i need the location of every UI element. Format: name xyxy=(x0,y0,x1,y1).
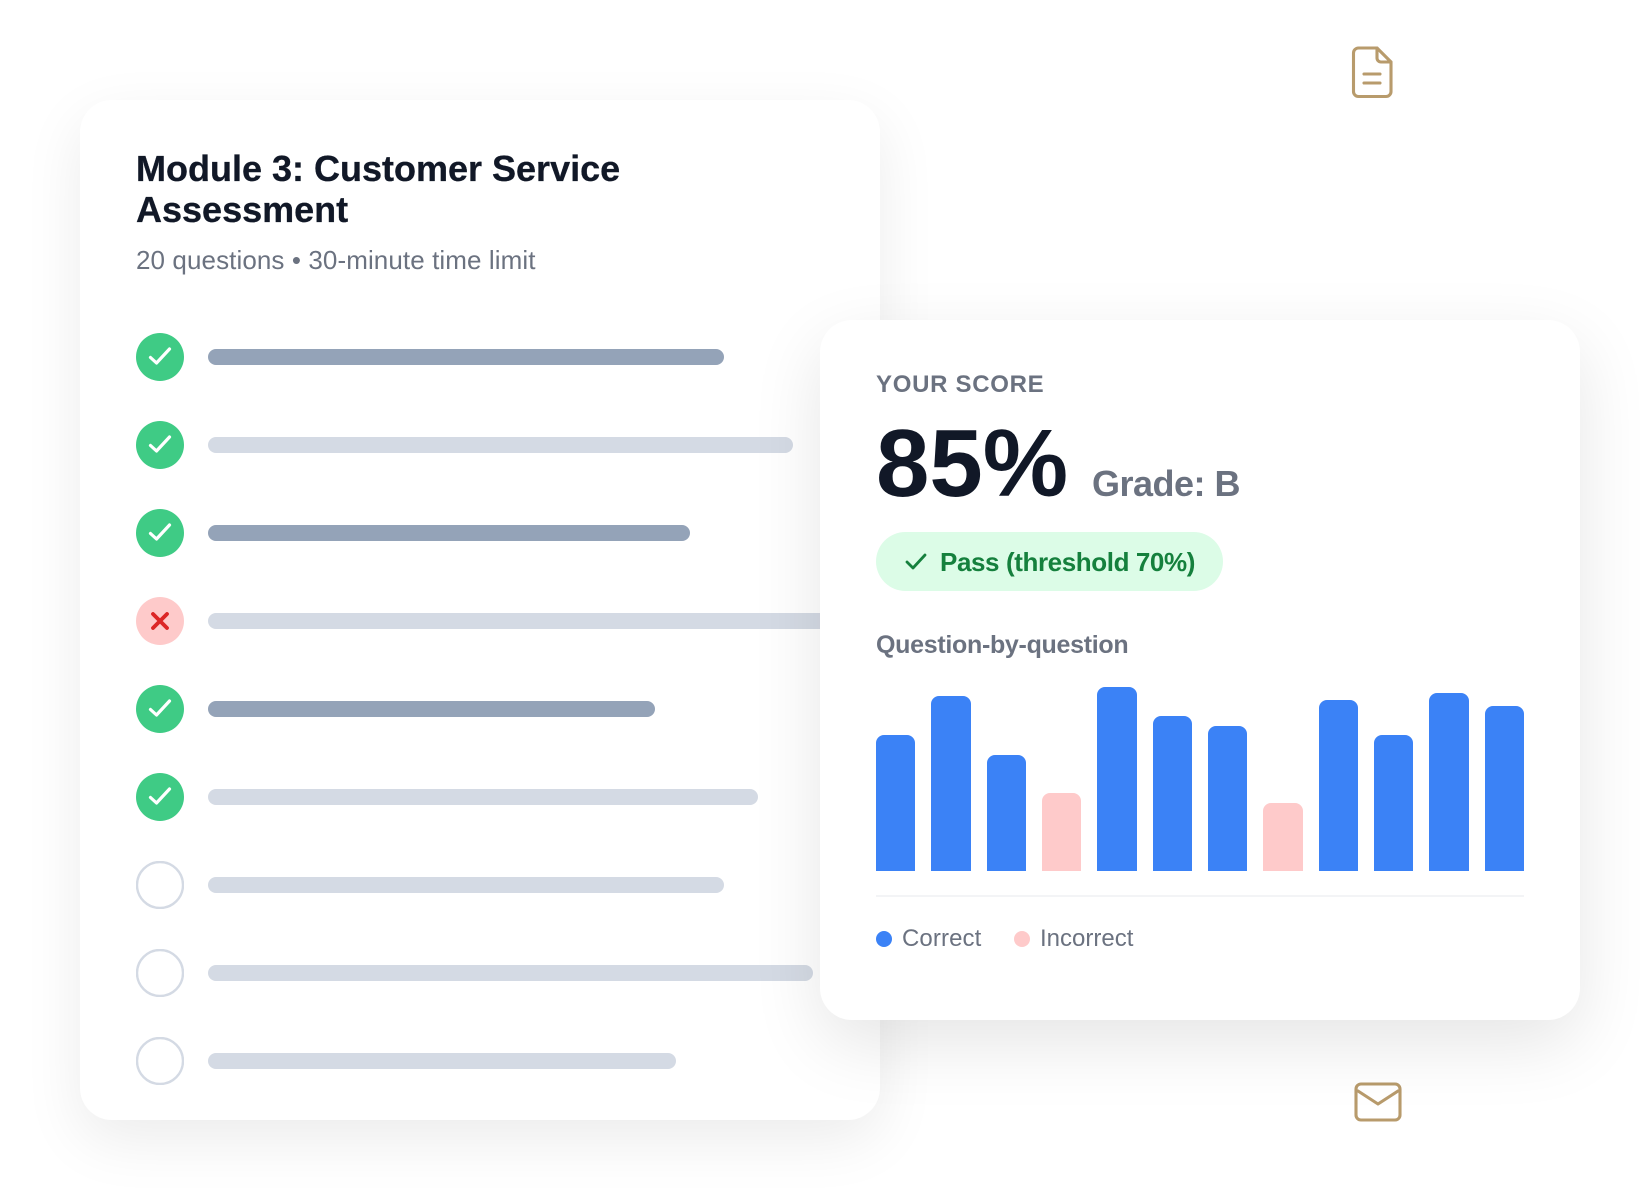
question 2 status: correct xyxy=(136,421,184,469)
icon: envelope xyxy=(1354,1082,1402,1122)
bar q5 correct xyxy=(1097,687,1137,871)
stat: grade: Grade: B xyxy=(1092,463,1240,504)
heading: question by question: Question-by-question xyxy=(876,631,1128,659)
panel: module assessment xyxy=(80,100,880,1120)
question 5 status: correct xyxy=(136,685,184,733)
bar q4 incorrect xyxy=(1042,793,1081,871)
bar q6 correct xyxy=(1153,716,1192,871)
icon: document xyxy=(1352,46,1393,98)
bar q2 correct xyxy=(931,696,971,871)
question 9 status: unanswered xyxy=(136,1037,184,1085)
bar q10 correct xyxy=(1374,735,1413,871)
panel: score xyxy=(820,320,1580,1020)
bar q11 correct xyxy=(1429,693,1469,871)
question 3 status: correct xyxy=(136,509,184,557)
question 4 bar xyxy=(208,613,848,629)
legend dot: incorrect xyxy=(1014,931,1030,947)
question 4 status: incorrect xyxy=(136,597,184,645)
question 7 status: unanswered xyxy=(136,861,184,909)
text: module details: 20 questions • 30-minute time limit xyxy=(136,245,536,275)
question 8 status: unanswered xyxy=(136,949,184,997)
bar q1 correct xyxy=(876,735,915,871)
question 9 bar xyxy=(208,1053,676,1069)
bar q9 correct xyxy=(1319,700,1358,871)
label: your score: YOUR SCORE xyxy=(876,371,1044,398)
question 8 bar xyxy=(208,965,813,981)
bar q8 incorrect xyxy=(1263,803,1303,871)
stat: score percent: 85% xyxy=(876,410,1068,517)
question 1 bar xyxy=(208,349,724,365)
question 6 status: correct xyxy=(136,773,184,821)
bar q12 correct xyxy=(1485,706,1524,871)
heading: module title: Module 3: Customer Service xyxy=(136,148,620,189)
legend xyxy=(876,925,1134,952)
question 1 status: correct xyxy=(136,333,184,381)
question 7 bar xyxy=(208,877,724,893)
badge: pass xyxy=(876,532,1223,591)
legend label: correct: Correct xyxy=(902,925,981,952)
bar q7 correct xyxy=(1208,726,1247,871)
question 2 bar xyxy=(208,437,793,453)
heading: module title xyxy=(136,148,620,230)
bar q3 correct xyxy=(987,755,1026,871)
heading: module title: Assessment xyxy=(136,189,348,230)
question list xyxy=(136,333,820,1085)
legend label: incorrect: Incorrect xyxy=(1040,925,1133,952)
legend dot: correct xyxy=(876,931,892,947)
question 3 bar xyxy=(208,525,690,541)
bar chart xyxy=(876,687,1524,871)
question 5 bar xyxy=(208,701,655,717)
icon: check xyxy=(906,554,926,570)
question 6 bar xyxy=(208,789,758,805)
text: pass threshold: Pass (threshold 70%) xyxy=(940,547,1195,577)
